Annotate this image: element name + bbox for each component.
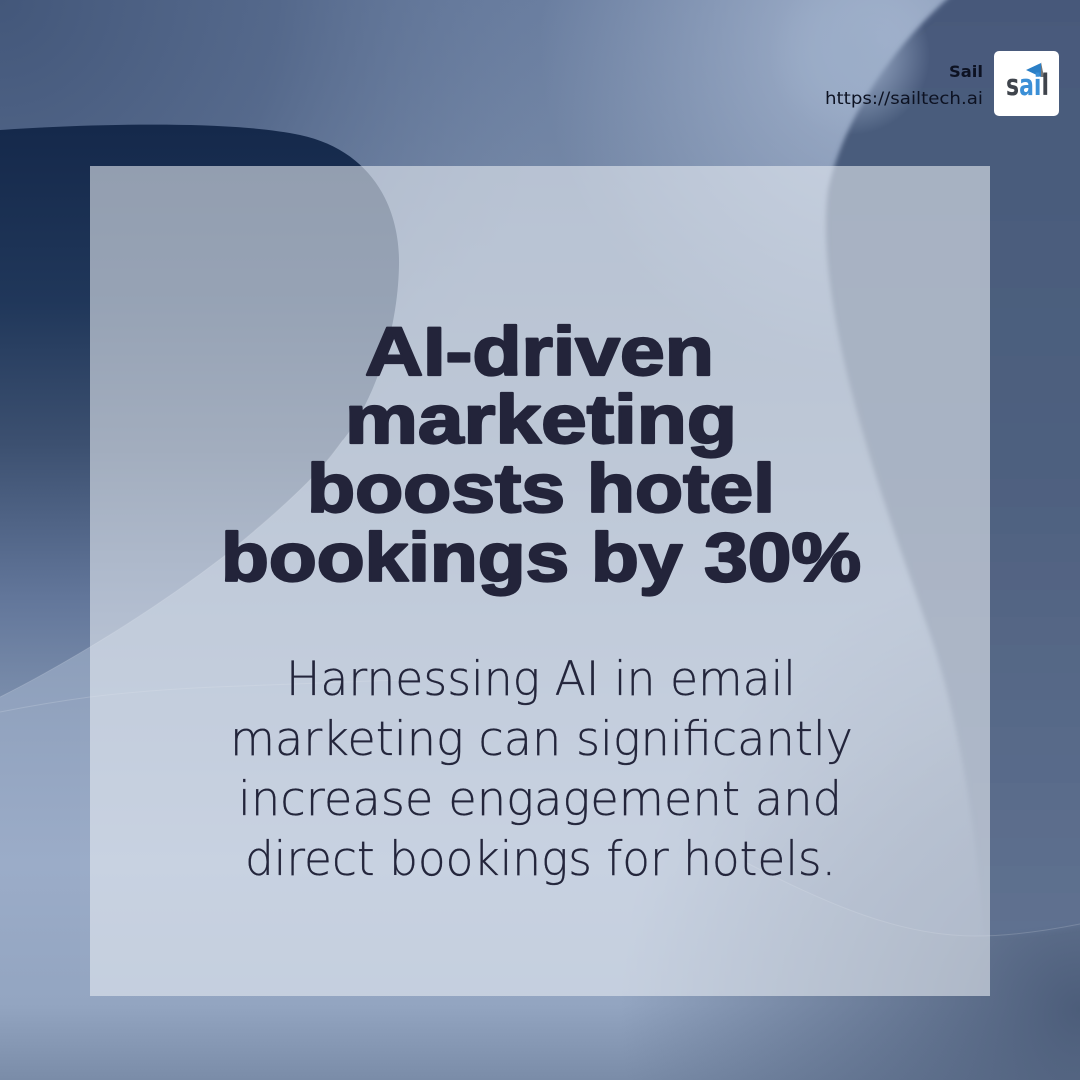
brand name and url: Sail bbox=[949, 62, 983, 81]
body text: increase engagement and bbox=[238, 772, 842, 827]
body text bbox=[230, 652, 853, 887]
shaded curve area lower right bbox=[745, 740, 990, 936]
title: marketing bbox=[345, 381, 737, 458]
title: AI-driven bbox=[365, 313, 714, 390]
logo: sail bbox=[1006, 68, 1049, 102]
thin light lines lower left bbox=[0, 440, 343, 712]
dark swoosh top left bbox=[0, 125, 399, 697]
body text: direct bookings for hotels. bbox=[245, 832, 836, 887]
title bbox=[221, 313, 861, 596]
soft light over top of right swoosh bbox=[852, 31, 924, 128]
body text: Harnessing AI in email bbox=[286, 652, 796, 707]
title: boosts hotel bbox=[307, 450, 775, 527]
body text: marketing can significantly bbox=[230, 712, 853, 767]
darker swoosh right bbox=[826, 0, 1080, 936]
logo bbox=[994, 51, 1059, 116]
brand name and url: https://sailtech.ai bbox=[825, 89, 983, 109]
brand name and url bbox=[825, 62, 983, 109]
lower right curve line bbox=[794, 886, 1080, 936]
translucent content panel bbox=[90, 166, 990, 996]
title: bookings by 30% bbox=[221, 519, 861, 596]
